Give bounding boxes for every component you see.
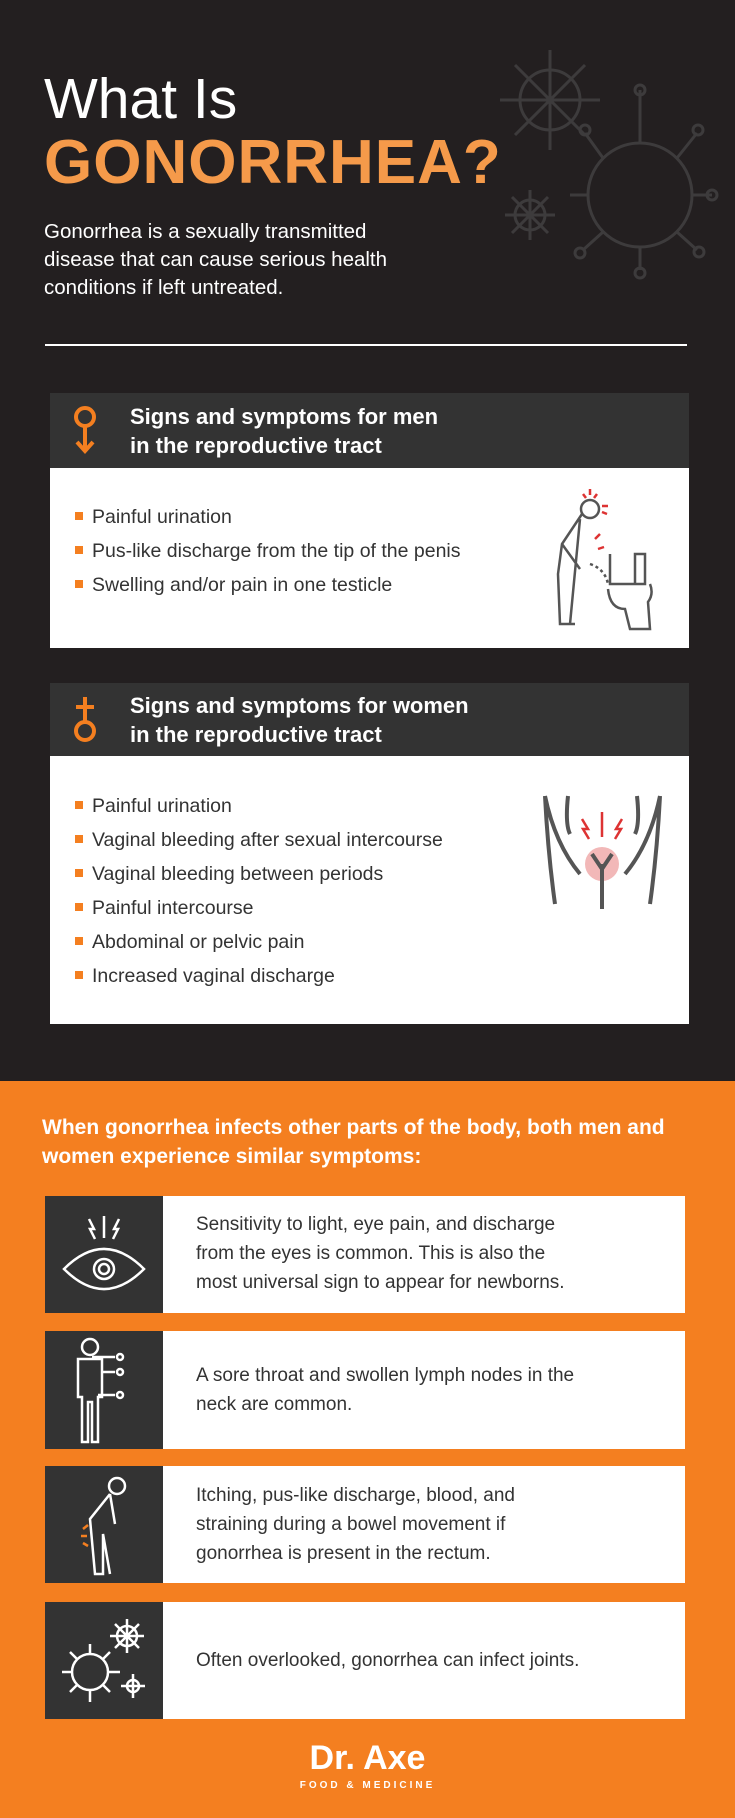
panel: women symptoms: Increased vaginal discharge [92,965,335,987]
panel: men symptoms: Painful urination [92,506,232,528]
panel: women header [50,683,689,756]
panel: men symptoms: Swelling and/or pain in one testicle [92,574,392,596]
card: joints [45,1602,685,1719]
intro text [44,220,387,299]
panel: women symptoms: Abdominal or pelvic pain [92,931,304,953]
logo: Dr. Axe [310,1739,425,1777]
intro text: Gonorrhea is a sexually transmitted [44,220,366,243]
card: throat [45,1331,685,1449]
title: What Is [44,67,237,131]
orange section [0,1081,735,1818]
icon: pelvis pain [543,796,662,909]
icon: person bending [45,1466,163,1583]
card: eyes [45,1196,685,1313]
panel: men header [50,393,689,468]
card: throat: A sore throat and swollen lymph nodes in the [196,1365,574,1386]
card: joints: Often overlooked, gonorrhea can infect joints. [196,1650,579,1671]
card: eyes: from the eyes is common. This is also the [196,1243,545,1264]
panel: women symptoms [50,756,689,1024]
panel: women symptoms: Painful urination [92,795,232,817]
icon: female symbol [74,697,96,742]
title [44,67,502,197]
icon: male symbol [74,406,96,454]
panel: women symptoms: Vaginal bleeding after sexual intercourse [92,829,443,851]
card: eyes: Sensitivity to light, eye pain, and discharge [196,1214,555,1235]
panel: women header: Signs and symptoms for women [130,693,469,718]
card: rectum [45,1466,685,1583]
card: rectum: straining during a bowel movement if [196,1514,505,1535]
heading: When gonorrhea infects other parts of the body, both men and women experience similar symptoms: [42,1116,665,1168]
panel: women symptoms: Painful intercourse [92,897,254,919]
intro text: conditions if left untreated. [44,276,283,299]
logo: FOOD & MEDICINE [300,1780,435,1791]
panel: women symptoms: Vaginal bleeding between periods [92,863,383,885]
panel: women header: in the reproductive tract [130,722,382,747]
icon: man urinating [556,489,653,630]
card: throat: neck are common. [196,1394,352,1415]
decorative virus icons [500,50,718,280]
icon: body lymph [45,1331,163,1449]
card: rectum: gonorrhea is present in the rectum. [196,1543,491,1564]
logo [300,1739,435,1791]
panel: men symptoms: Pus-like discharge from the tip of the penis [92,540,461,562]
card: eyes: most universal sign to appear for newborns. [196,1272,565,1293]
icon: bacteria [45,1602,163,1719]
panel: men symptoms [50,468,689,648]
card: rectum: Itching, pus-like discharge, blood, and [196,1485,515,1506]
icon: eye [45,1196,163,1313]
panel: men header: in the reproductive tract [130,433,382,458]
panel: men header: Signs and symptoms for men [130,404,438,429]
title: GONORRHEA? [44,128,502,197]
intro text: disease that can cause serious health [44,248,387,271]
